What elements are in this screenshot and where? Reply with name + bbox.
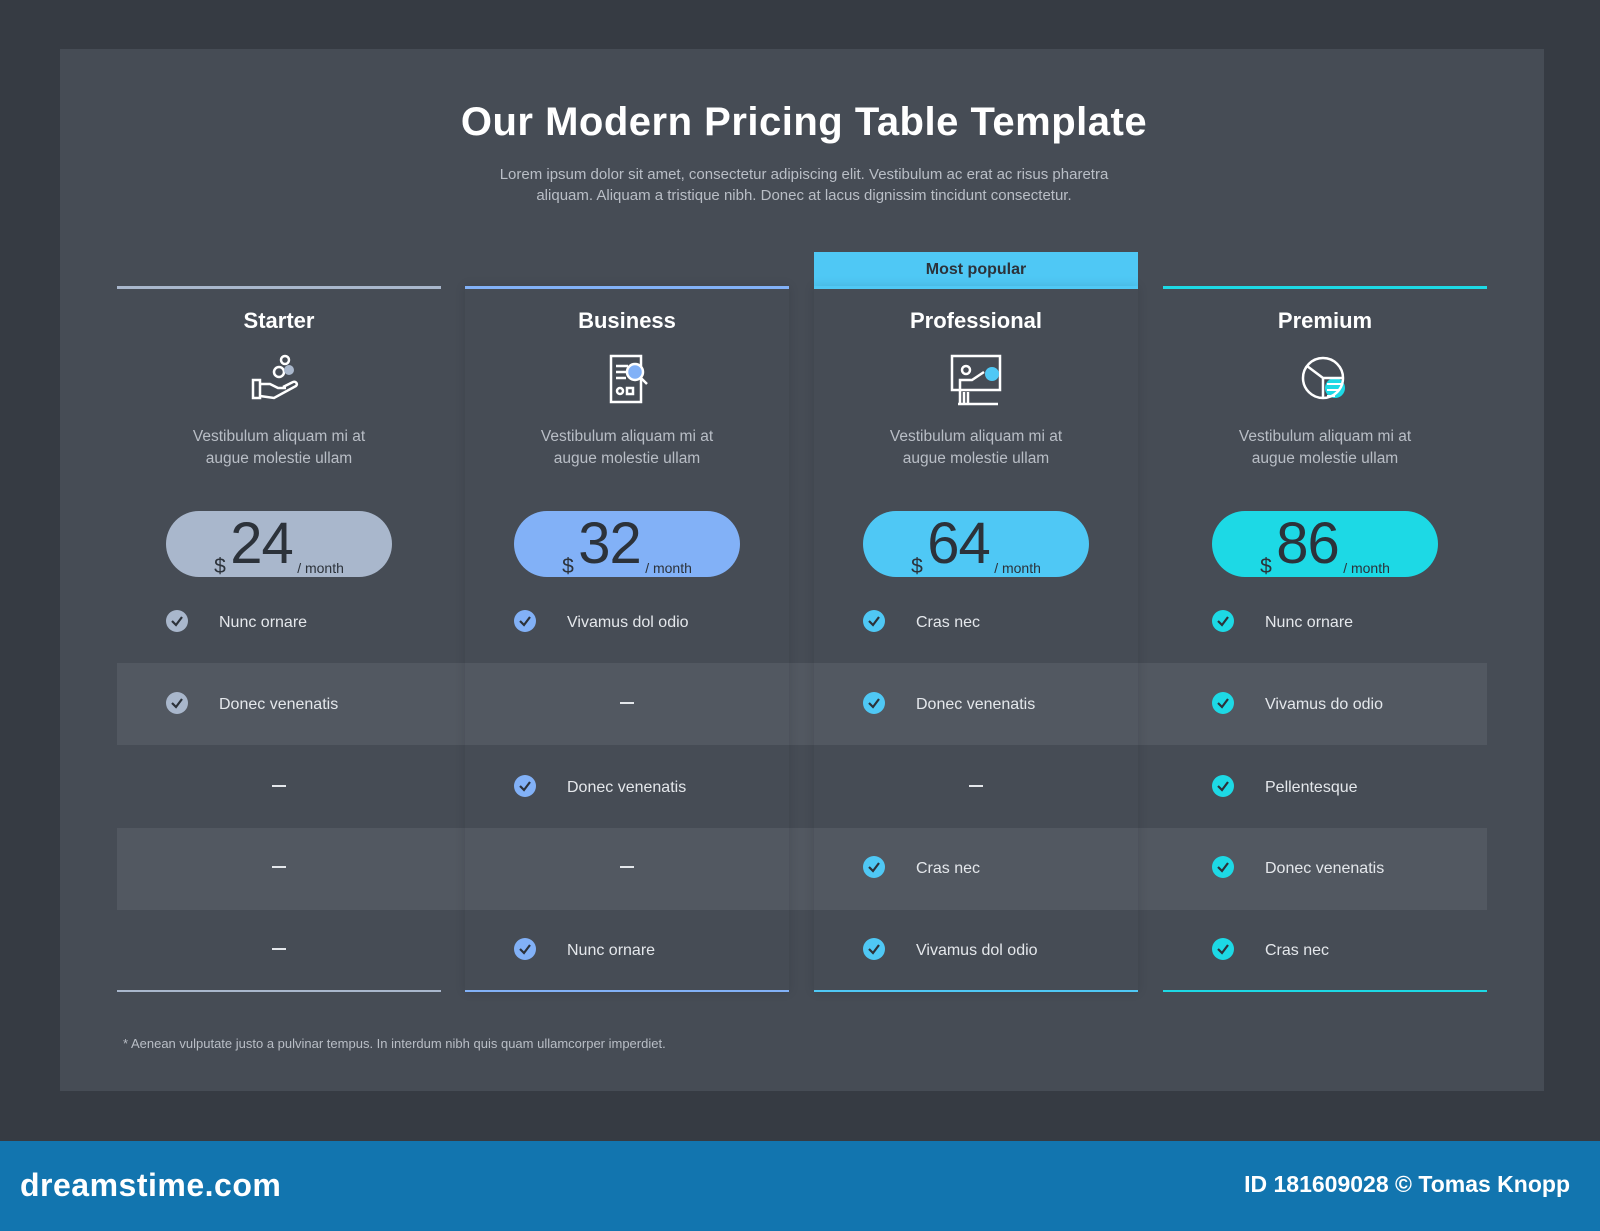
price pill: $ 64 / month: [911, 511, 1041, 578]
footer brand: dreamstime.com: [20, 1167, 281, 1203]
icon: hand with coins: [252, 354, 298, 400]
features: [863, 610, 1038, 960]
price pill: $ 24 / month: [214, 511, 344, 578]
description: augue molestie ullam: [1252, 450, 1398, 467]
plan name: Business: [578, 308, 676, 333]
description: [890, 428, 1062, 467]
features: Donec venenatis: [1265, 860, 1384, 877]
row band 2: [117, 663, 1487, 745]
most popular label: Most popular: [926, 261, 1026, 278]
features: Pellentesque: [1265, 779, 1358, 796]
features: Vivamus do odio: [1265, 696, 1383, 713]
features: Nunc ornare: [567, 942, 655, 959]
most popular label: [814, 252, 1138, 287]
plan name: Professional: [910, 308, 1042, 333]
description: Vestibulum aliquam mi at: [193, 428, 365, 445]
column: Professional: [814, 286, 1138, 992]
plan name: Premium: [1278, 308, 1372, 333]
features: [166, 610, 338, 950]
column: Premium: [1163, 286, 1487, 992]
features: Vivamus dol odio: [567, 614, 689, 631]
subtitle: Lorem ipsum dolor sit amet, consectetur adipiscing elit. Vestibulum ac erat ac risus pharetra: [500, 166, 1108, 183]
footer bar: [0, 1141, 1600, 1231]
features: Cras nec: [916, 614, 980, 631]
price pill: [514, 511, 740, 577]
footer credit: ID 181609028 © Tomas Knopp: [1244, 1171, 1570, 1197]
background panel: [60, 49, 1544, 1091]
title: Our Modern Pricing Table Template: [461, 100, 1147, 144]
description: Vestibulum aliquam mi at: [890, 428, 1062, 445]
icon: pie chart: [1302, 356, 1345, 400]
subtitle: [500, 166, 1108, 204]
description: augue molestie ullam: [903, 450, 1049, 467]
features: Donec venenatis: [916, 696, 1035, 713]
description: augue molestie ullam: [554, 450, 700, 467]
features: [514, 610, 689, 960]
description: Vestibulum aliquam mi at: [541, 428, 713, 445]
features: Nunc ornare: [219, 614, 307, 631]
price pill: $ 32 / month: [562, 511, 692, 578]
features: Nunc ornare: [1265, 614, 1353, 631]
features: Donec venenatis: [219, 696, 338, 713]
row band 4: [117, 828, 1487, 910]
features: [1212, 610, 1384, 960]
footnote: * Aenean vulputate justo a pulvinar tempus. In interdum nibh quis quam ullamcorper imperdiet.: [123, 1036, 666, 1051]
description: augue molestie ullam: [206, 450, 352, 467]
features: Cras nec: [1265, 942, 1329, 959]
column: Business: [465, 286, 789, 992]
price pill: [863, 511, 1089, 577]
description: [541, 428, 714, 467]
price pill: $ 86 / month: [1260, 511, 1390, 578]
price pill: [166, 511, 392, 577]
subtitle: aliquam. Aliquam a tristique nibh. Donec at lacus dignissim tincidunt consectetur.: [536, 187, 1072, 204]
features: Cras nec: [916, 860, 980, 877]
description: Vestibulum aliquam mi at: [1239, 428, 1411, 445]
description: [1239, 428, 1412, 467]
features: Donec venenatis: [567, 779, 686, 796]
description: [193, 428, 366, 467]
icon: document with magnifier: [610, 354, 648, 404]
plan name: Starter: [244, 308, 314, 333]
features: Vivamus dol odio: [916, 942, 1038, 959]
icon: presenter at board: [950, 354, 1002, 406]
column: Starter: [117, 286, 441, 992]
price pill: [1212, 511, 1438, 577]
